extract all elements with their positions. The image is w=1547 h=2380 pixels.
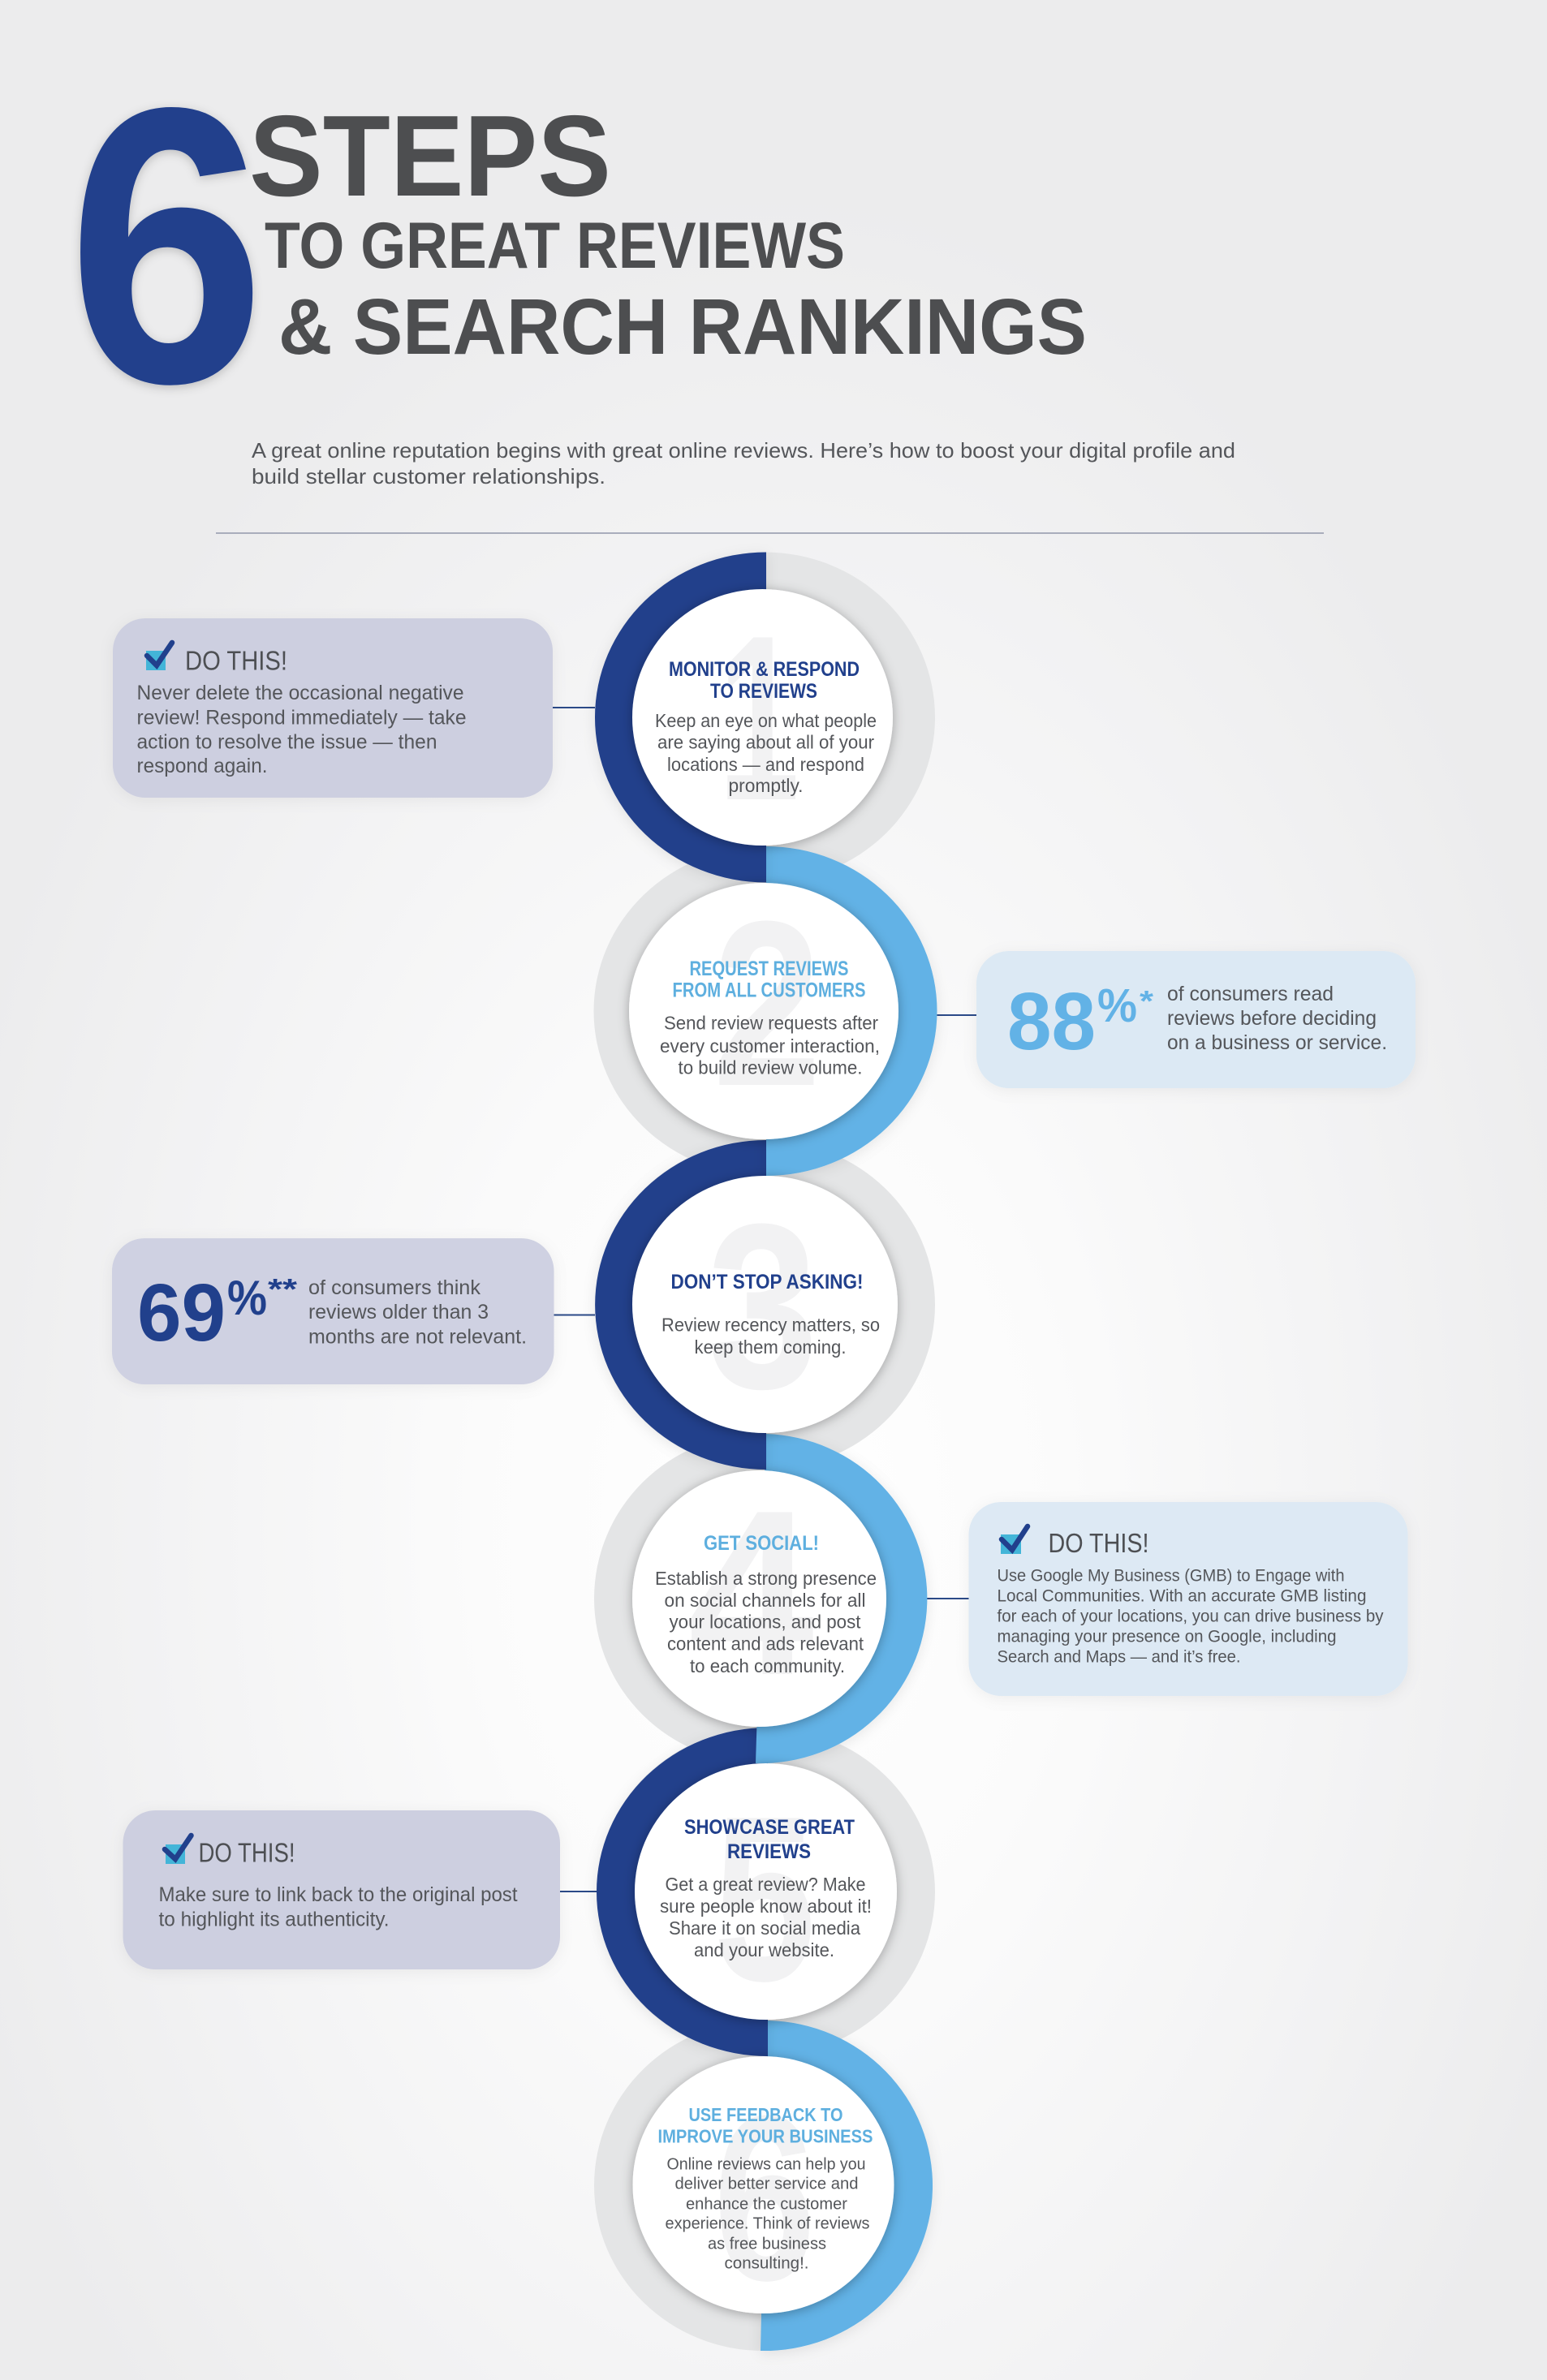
step 1 text: are saying about all of your <box>657 732 874 753</box>
step 6 text: Online reviews can help you <box>667 2155 865 2173</box>
step 3 text: DON’T STOP ASKING! <box>670 1271 864 1293</box>
intro paragraph: build stellar customer relationships. <box>252 464 605 488</box>
callout: do this, google my business: for each of your locations, you can drive business by <box>997 1607 1384 1626</box>
step 4 text: content and ads relevant <box>667 1633 864 1654</box>
step 2 text <box>660 872 880 1135</box>
step 4 text: Establish a strong presence <box>655 1568 877 1589</box>
callout: 69 percent statistic: ** <box>268 1272 297 1306</box>
callout: do this, google my business: managing your presence on Google, including <box>997 1628 1336 1646</box>
step 6 text: as free business <box>708 2235 826 2253</box>
step 3 text: 3 <box>707 1175 818 1438</box>
step 4 text: GET SOCIAL! <box>704 1532 819 1555</box>
callout: 69 percent statistic <box>112 1238 554 1384</box>
grey ring backgrounds <box>594 552 937 2351</box>
callout: 69 percent statistic: 69 <box>137 1267 226 1358</box>
title line: search rankings: & SEARCH RANKINGS <box>278 282 1087 371</box>
step 6 text <box>657 2067 873 2330</box>
callout: 88 percent statistic: of consumers read <box>1167 983 1334 1005</box>
connector lines <box>553 707 977 1892</box>
step 4 text: 4 <box>688 1461 816 1724</box>
step 5 text: sure people know about it! <box>660 1896 872 1917</box>
step 2 text: 2 <box>713 872 821 1135</box>
callout: do this, google my business: Use Google My Business (GMB) to Engage with <box>997 1566 1344 1586</box>
step 2 text: to build review volume. <box>679 1057 862 1078</box>
step 5 text: SHOWCASE GREAT <box>684 1816 855 1839</box>
step 2 text: every customer interaction, <box>660 1035 880 1057</box>
callout: 69 percent statistic: reviews older than 3 <box>308 1301 489 1323</box>
callout: 88 percent statistic: reviews before deciding <box>1167 1007 1377 1030</box>
step 1 text: 1 <box>718 587 799 850</box>
big numeral 6: 6 <box>67 26 265 465</box>
step 3 text: Review recency matters, so <box>661 1315 880 1336</box>
step 1 text: TO REVIEWS <box>710 680 817 703</box>
step 2 text: FROM ALL CUSTOMERS <box>672 979 865 1001</box>
callout: do this, link back: Make sure to link back to the original post <box>159 1883 518 1906</box>
callout: do this, negative reviews: review! Respond immediately — take <box>136 706 466 729</box>
step 5 text: Share it on social media <box>669 1917 860 1939</box>
step 4 text <box>655 1461 877 1724</box>
intro paragraph <box>252 438 1235 488</box>
callout: 69 percent statistic: months are not relevant. <box>308 1326 527 1349</box>
callout: 88 percent statistic: 88 <box>1007 976 1096 1067</box>
step 3 text: keep them coming. <box>695 1336 846 1358</box>
step 4 text: your locations, and post <box>669 1612 861 1633</box>
step 6 text: enhance the customer <box>686 2196 847 2214</box>
intro paragraph: A great online reputation begins with great online reviews. Here’s how to boost your digital profile and <box>252 438 1235 463</box>
callout: do this, negative reviews: Never delete the occasional negative <box>136 682 464 704</box>
callout: 88 percent statistic <box>976 951 1416 1088</box>
step 1 text: MONITOR & RESPOND <box>669 658 860 681</box>
step 4 text: on social channels for all <box>664 1590 865 1611</box>
step 1 text: promptly. <box>729 775 804 796</box>
step 6 text: IMPROVE YOUR BUSINESS <box>657 2126 873 2147</box>
icon: checkmark <box>146 643 172 670</box>
step 5 text: REVIEWS <box>727 1840 811 1863</box>
callout: do this, google my business <box>969 1502 1407 1696</box>
step 5 text: 5 <box>713 1767 816 2030</box>
step 1 text: Keep an eye on what people <box>655 710 877 731</box>
callout: do this, google my business: Search and Maps — and it’s free. <box>997 1647 1240 1667</box>
coloured half rings <box>595 552 937 2351</box>
callout: do this, negative reviews <box>113 618 553 798</box>
callout: do this, link back <box>123 1810 560 1969</box>
callout: 88 percent statistic: * <box>1140 984 1153 1018</box>
step 6 text: deliver better service and <box>675 2175 859 2193</box>
step 6 text: consulting!. <box>724 2254 808 2272</box>
step 5 text <box>660 1767 872 2030</box>
step 6 text: USE FEEDBACK TO <box>688 2104 842 2125</box>
callout: 88 percent statistic: % <box>1097 979 1137 1032</box>
callout: do this, negative reviews: respond again. <box>136 755 268 777</box>
icon: checkmark <box>165 1836 192 1864</box>
step 3 text <box>661 1175 880 1438</box>
callout: do this, google my business: Local Communities. With an accurate GMB listing <box>997 1587 1367 1605</box>
step 6 text: experience. Think of reviews <box>666 2215 870 2233</box>
step 4 text: to each community. <box>690 1655 845 1676</box>
callout: 88 percent statistic: on a business or service. <box>1167 1031 1387 1054</box>
step 5 text: Get a great review? Make <box>666 1874 865 1895</box>
step 2 text: Send review requests after <box>664 1013 878 1034</box>
callout: do this, link back: to highlight its authenticity. <box>159 1909 390 1931</box>
step 6 text: 6 <box>713 2067 816 2330</box>
step 5 text: and your website. <box>694 1939 834 1960</box>
title <box>67 26 1087 465</box>
icon: checkmark <box>1001 1526 1028 1554</box>
step 1 text <box>655 587 877 850</box>
title line: steps: STEPS <box>249 92 611 221</box>
step 2 text: REQUEST REVIEWS <box>690 958 849 980</box>
title line: to great reviews: TO GREAT REVIEWS <box>265 209 845 282</box>
callout: 69 percent statistic: of consumers think <box>308 1276 480 1299</box>
callout: do this, link back: DO THIS! <box>198 1837 295 1868</box>
callout: do this, google my business: DO THIS! <box>1049 1528 1149 1558</box>
callout: 69 percent statistic: % <box>227 1271 267 1325</box>
callout: do this, negative reviews: DO THIS! <box>185 646 287 675</box>
step 1 text: locations — and respond <box>667 754 864 775</box>
callout: do this, negative reviews: action to resolve the issue — then <box>136 730 437 753</box>
white inner circles <box>629 589 898 2313</box>
